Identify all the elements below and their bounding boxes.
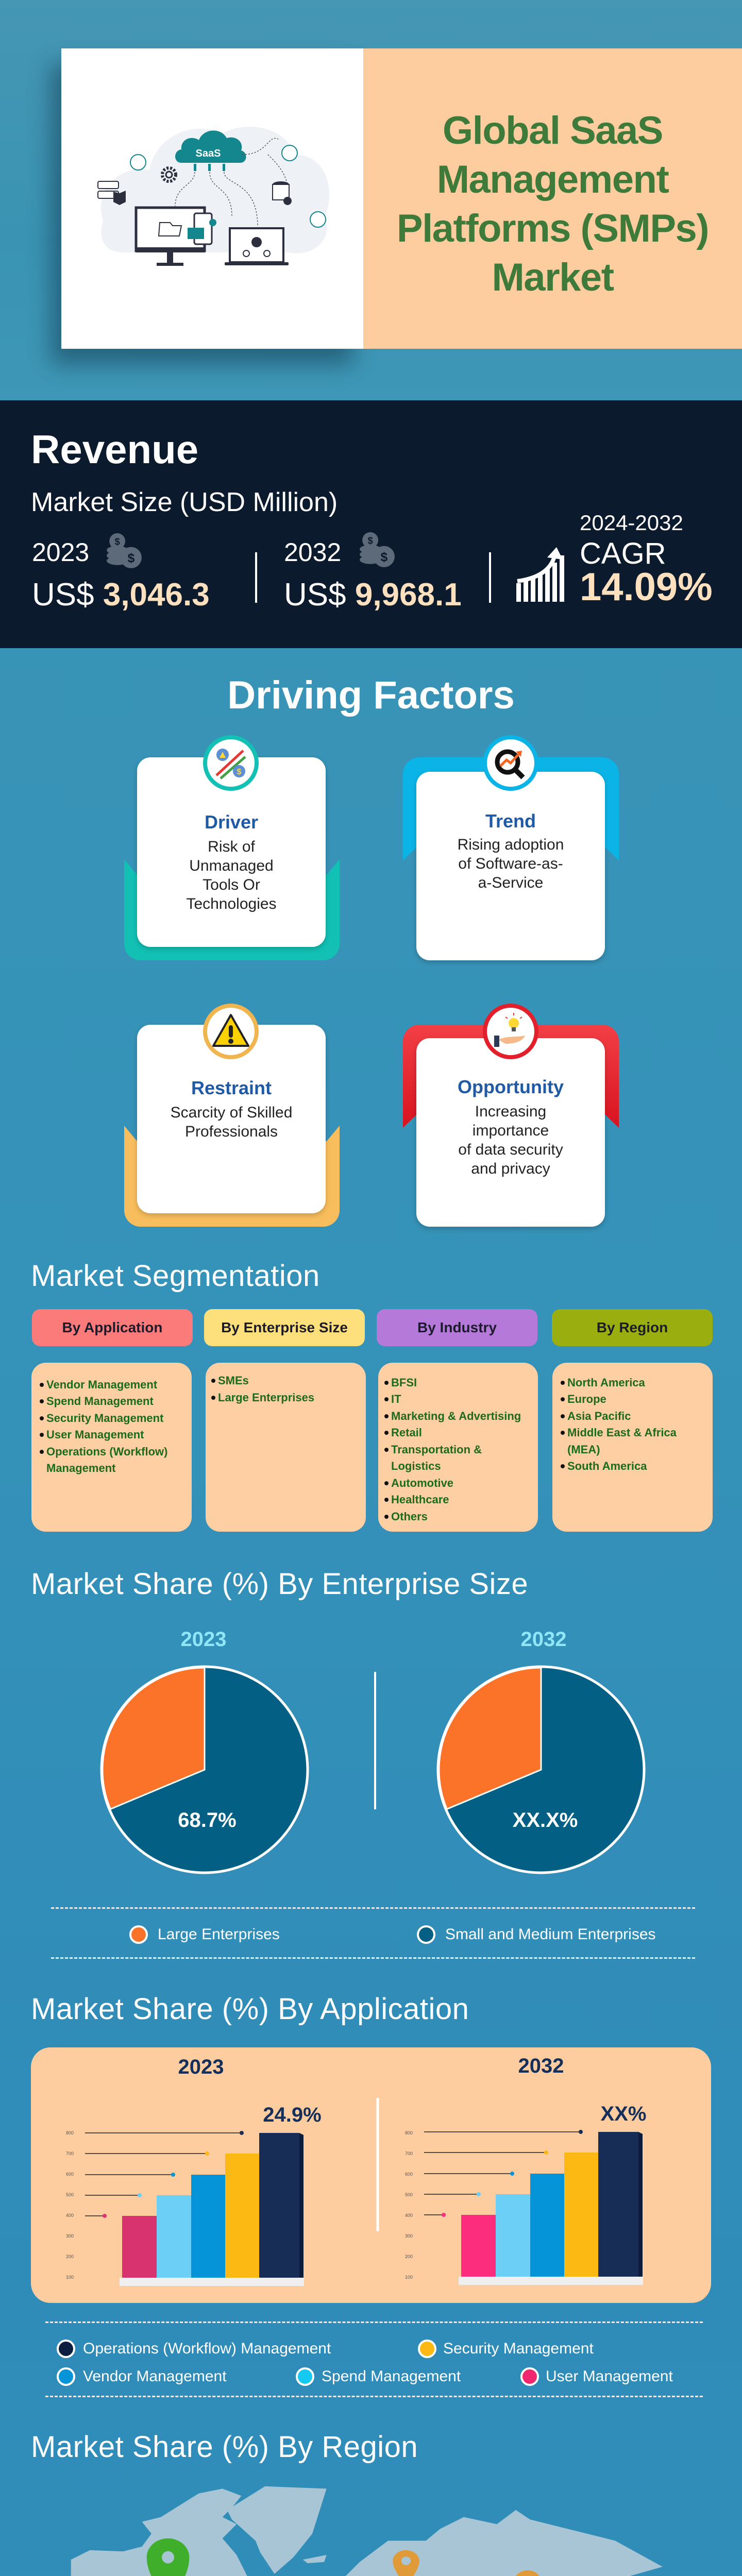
bar chart 2023: 200 <box>66 2254 74 2259</box>
icon: coins <box>360 532 395 567</box>
bar chart 2023: 700 <box>66 2151 74 2156</box>
pie 2032: XX.X% <box>513 1809 578 1832</box>
heading: market share by application: Market Share (%) By Application <box>31 1992 469 2026</box>
bar chart 2032 <box>405 2055 646 2285</box>
bar chart 2023: 300 <box>66 2233 74 2239</box>
bar chart 2032: 2032 <box>518 2055 564 2077</box>
icon: coins <box>107 533 142 568</box>
trend text: Rising adoption <box>458 836 564 853</box>
title: Global SaaS <box>443 109 663 152</box>
driver text: Technologies <box>186 895 277 912</box>
divider <box>255 552 257 603</box>
trend text: a-Service <box>478 874 543 891</box>
stat: 2023: 2023 <box>32 538 89 567</box>
bar chart 2032: 600 <box>405 2172 413 2177</box>
trend text <box>458 836 564 891</box>
bar chart 2032: 800 <box>405 2130 413 2136</box>
list: enterprise size: Large Enterprises <box>218 1391 314 1404</box>
opportunity text: of data security <box>458 1141 563 1158</box>
pill: by region: By Region <box>597 1319 668 1335</box>
pie chart: enterprise size <box>100 1628 645 1874</box>
icon: opportunity <box>483 1004 538 1059</box>
legend: application: Operations (Workflow) Management <box>83 2340 331 2357</box>
panel: trend <box>403 735 619 964</box>
restraint text: Professionals <box>185 1123 278 1140</box>
icon: server <box>98 181 119 189</box>
revenue heading: Revenue <box>31 427 198 472</box>
trend text: of Software-as- <box>458 855 563 872</box>
stat: 2032 <box>284 532 462 613</box>
CAGR block: 2024-2032 <box>580 511 683 535</box>
pill: by application: By Application <box>62 1319 162 1335</box>
pie 2032: 2032 <box>521 1628 566 1651</box>
bar chart 2023: 2023 <box>178 2056 224 2078</box>
pin: Europe <box>393 2550 419 2576</box>
opportunity text: and privacy <box>471 1160 550 1177</box>
illustration: pale cloud backdrop <box>101 127 329 253</box>
pill: by industry: By Industry <box>417 1319 497 1335</box>
icon: growth chart <box>516 547 564 602</box>
stat: 2023: US$ 3,046.3 <box>32 577 210 613</box>
pill: by industry <box>377 1309 537 1346</box>
icon: coins: $ <box>128 552 135 566</box>
trend title: Trend <box>485 810 536 832</box>
list: region: (MEA) <box>567 1443 600 1456</box>
pill: by enterprise size <box>204 1309 365 1346</box>
restraint text: Scarcity of Skilled <box>171 1104 292 1121</box>
icon: gear <box>162 168 176 181</box>
icon: SaaS cloud: SaaS <box>196 148 221 159</box>
revenue band <box>0 400 742 648</box>
icon: trend <box>483 735 538 791</box>
panel: application bar charts <box>31 2047 711 2303</box>
bar chart 2023 <box>66 2056 322 2286</box>
icon: laptop <box>230 228 283 262</box>
list: industry: IT <box>391 1393 401 1405</box>
CAGR block: CAGR <box>580 537 666 570</box>
stat: 2032: 2032 <box>284 538 341 567</box>
pie 2023: 68.7% <box>178 1809 237 1832</box>
panel: restraint <box>124 1004 340 1227</box>
pill: by region <box>552 1309 713 1346</box>
divider <box>374 1672 376 1809</box>
driver text: Risk of <box>208 838 255 855</box>
list: application <box>31 1363 192 1532</box>
bar chart 2023: 800 <box>66 2130 74 2136</box>
panel: driver <box>124 735 340 960</box>
bar chart 2023: 600 <box>66 2172 74 2177</box>
list: industry: Others <box>391 1510 428 1523</box>
pie 2032 <box>438 1628 644 1873</box>
heading: driving factors: Driving Factors <box>227 673 515 717</box>
icon: driver <box>203 735 259 791</box>
opportunity text: Increasing <box>475 1103 546 1120</box>
divider <box>376 2098 379 2231</box>
list: region: South America <box>567 1460 647 1472</box>
icon: warning <box>203 1004 259 1059</box>
title <box>397 109 709 299</box>
legend: application: Security Management <box>443 2340 594 2357</box>
list: enterprise size: SMEs <box>218 1374 249 1387</box>
list: region: Middle East & Africa <box>567 1426 677 1439</box>
list: industry: Marketing & Advertising <box>391 1410 521 1422</box>
icon: driver: $ <box>237 768 242 776</box>
title panel <box>363 48 742 349</box>
driver text: Unmanaged <box>189 857 274 874</box>
opportunity text: importance <box>473 1122 549 1139</box>
legend: application <box>45 2321 703 2397</box>
list: application: Vendor Management <box>46 1378 157 1391</box>
stat: 2032: US$ 9,968.1 <box>284 577 462 613</box>
list: region: Asia Pacific <box>567 1410 631 1422</box>
icon: coins: $ <box>367 535 373 546</box>
pill: by enterprise size: By Enterprise Size <box>221 1319 348 1335</box>
legend: application: Spend Management <box>322 2368 461 2385</box>
list: industry <box>378 1363 538 1532</box>
icon: SaaS cloud <box>175 130 246 171</box>
list: region <box>552 1363 713 1532</box>
world map <box>71 2486 663 2576</box>
header background <box>0 0 742 400</box>
market size subtitle: Market Size (USD Million) <box>31 487 338 517</box>
list: application: Spend Management <box>46 1395 154 1408</box>
bar chart 2023: 400 <box>66 2213 74 2218</box>
icon: coins: $ <box>381 551 388 565</box>
list: industry: Transportation & <box>391 1443 482 1456</box>
bar chart 2032: XX% <box>601 2103 646 2125</box>
list: industry: Logistics <box>391 1460 441 1472</box>
legend: application: User Management <box>546 2368 673 2385</box>
panel: opportunity <box>403 1004 619 1230</box>
pin: Asia <box>514 2570 541 2576</box>
icon: desktop monitor <box>136 208 205 251</box>
header card: illustration <box>61 48 363 349</box>
legend: application: Vendor Management <box>83 2368 227 2385</box>
pie 2023: 2023 <box>181 1628 226 1651</box>
icon: users <box>130 155 146 170</box>
list: region: Europe <box>567 1393 606 1405</box>
bar chart 2032: 400 <box>405 2213 413 2218</box>
bar chart 2032: 300 <box>405 2233 413 2239</box>
stat: 2023 <box>32 533 210 613</box>
legend: enterprise size: Small and Medium Enterprises <box>445 1926 656 1943</box>
opportunity title: Opportunity <box>458 1076 564 1097</box>
title: Platforms (SMPs) <box>397 207 709 250</box>
bar chart 2032: 100 <box>405 2275 413 2280</box>
CAGR block: 14.09% <box>580 565 713 609</box>
title: Market <box>492 256 613 299</box>
restraint title: Restraint <box>191 1077 272 1098</box>
bar chart 2032: 700 <box>405 2151 413 2156</box>
heading: market segmentation: Market Segmentation <box>31 1259 320 1293</box>
icon: coins: $ <box>114 536 120 547</box>
list: industry: Automotive <box>391 1477 453 1489</box>
heading: market share by enterprise size: Market Share (%) By Enterprise Size <box>31 1567 528 1601</box>
heading: market share by region: Market Share (%) By Region <box>31 2430 418 2464</box>
list: industry: BFSI <box>391 1376 417 1389</box>
list: industry: Healthcare <box>391 1493 449 1506</box>
list: industry: Retail <box>391 1426 422 1439</box>
divider <box>489 552 491 603</box>
icon: database <box>273 181 289 188</box>
opportunity text <box>458 1103 563 1177</box>
restraint text <box>171 1104 292 1140</box>
title: Management <box>437 158 668 201</box>
bar chart 2023: 24.9% <box>263 2104 322 2126</box>
list: application: User Management <box>46 1428 144 1441</box>
list: region: North America <box>567 1376 645 1389</box>
list: enterprise size <box>206 1363 366 1532</box>
legend: enterprise size: Large Enterprises <box>158 1926 280 1943</box>
bar chart 2032: 200 <box>405 2254 413 2259</box>
driver text: Tools Or <box>203 876 260 893</box>
driver title: Driver <box>205 811 258 833</box>
pie 2023 <box>102 1628 308 1873</box>
CAGR block <box>580 511 713 609</box>
bar chart 2023: 100 <box>66 2275 74 2280</box>
list: application: Security Management <box>46 1412 163 1425</box>
legend: enterprise size <box>51 1907 695 1959</box>
bar chart 2023: 500 <box>66 2192 74 2197</box>
bar chart 2032: 500 <box>405 2192 413 2197</box>
pill: by application <box>32 1309 193 1346</box>
driver text <box>186 838 277 912</box>
list: application: Management <box>46 1462 115 1475</box>
list: application: Operations (Workflow) <box>46 1445 168 1458</box>
pin: North America (green) <box>147 2538 189 2576</box>
